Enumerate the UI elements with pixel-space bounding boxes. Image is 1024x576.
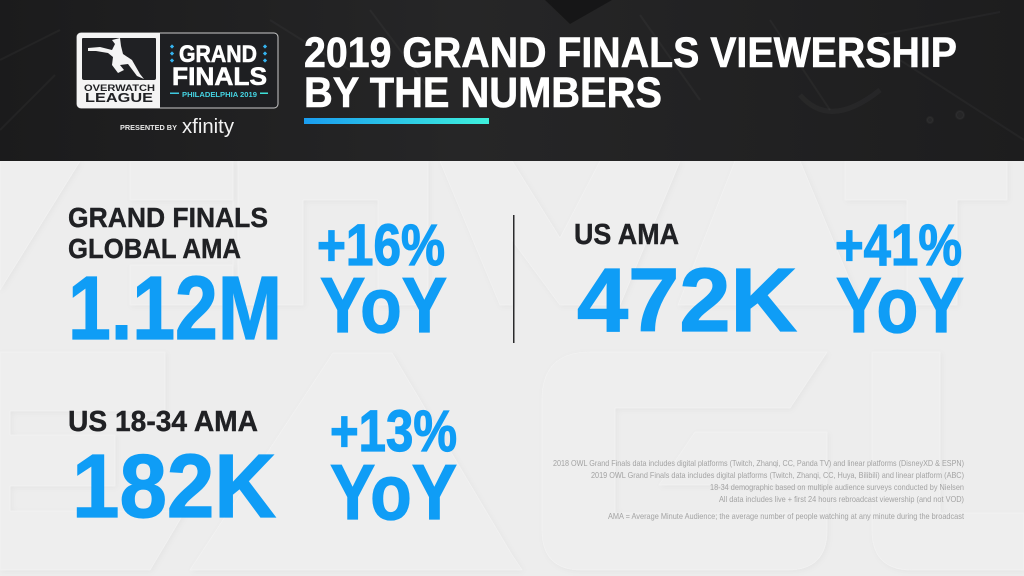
panel: dark header <box>0 0 1024 161</box>
footnotes: 18-34 demographic based on multiple audience surveys conducted by Nielsen <box>710 483 964 492</box>
growth: +13% YoY <box>330 399 457 536</box>
footnotes: AMA = Average Minute Audience; the average number of people watching at any minute during the broadcast <box>608 512 965 521</box>
growth: +16% YoY: +16% <box>317 213 445 278</box>
label: US AMA: US AMA <box>574 219 679 251</box>
logo: Overwatch League Grand Finals <box>77 33 278 108</box>
label: grand finals global AMA <box>68 202 268 264</box>
sponsor: presented by xfinity <box>120 116 234 138</box>
value: 182K: 182K <box>72 437 276 537</box>
icon: logo stars <box>170 44 267 63</box>
logo text: Overwatch League: LEAGUE <box>85 91 153 105</box>
footnotes: All data includes live + first 24 hours rebroadcast viewership (and not VOD) <box>719 495 964 504</box>
growth: +16% YoY: YoY <box>320 261 447 349</box>
growth: +41% YoY: +41% <box>835 213 962 278</box>
logo text: Overwatch League: OVERWATCH <box>84 83 155 94</box>
label: grand finals global AMA: GRAND FINALS <box>68 202 268 233</box>
sponsor: presented by xfinity: xfinity <box>182 116 234 138</box>
label: US 18-34 AMA: US 18-34 AMA <box>68 406 258 438</box>
title: 2019 GRAND FINALS VIEWERSHIP <box>304 29 957 77</box>
growth: +13% YoY: YoY <box>330 448 457 536</box>
stat: grand finals global AMA <box>68 202 447 359</box>
growth: +41% YoY <box>835 213 964 349</box>
growth: +41% YoY: YoY <box>836 261 964 349</box>
logo text: Philadelphia 2019: PHILADELPHIA 2019 <box>182 90 257 99</box>
title: BY THE NUMBERS <box>304 69 662 117</box>
icon: player silhouette panel <box>82 38 156 80</box>
logo text: Grand Finals: GRAND <box>179 41 257 68</box>
title accent bar <box>304 118 489 124</box>
background watermark: OVERWATCH LEAGUE letters <box>0 161 1024 570</box>
panel: light embossed background <box>0 161 1024 576</box>
title <box>304 29 957 117</box>
stat: US AMA <box>574 213 964 351</box>
logo text: Grand Finals: FINALS <box>172 63 267 91</box>
label: grand finals global AMA: GLOBAL AMA <box>68 233 241 264</box>
stat: US 18-34 AMA <box>68 399 457 537</box>
logo text: Grand Finals <box>172 41 267 91</box>
header photo texture <box>0 10 1024 140</box>
logo text: Overwatch League <box>84 83 155 105</box>
value: 1.12M: 1.12M <box>68 259 282 359</box>
footnotes <box>553 459 965 521</box>
growth: +16% YoY <box>317 213 447 349</box>
footnotes: 2019 OWL Grand Finals data includes digital platforms (Twitch, Zhanqi, CC, Huya, Bilibili) and linear platform (ABC) <box>591 471 964 480</box>
value: 472K: 472K <box>577 251 797 351</box>
footnotes: 2018 OWL Grand Finals data includes digital platforms (Twitch, Zhanqi, CC, Panda TV) and linear platforms (DisneyXD & ESPN) <box>553 459 964 468</box>
growth: +13% YoY: +13% <box>330 399 457 464</box>
divider <box>513 215 514 343</box>
sponsor: presented by xfinity: PRESENTED BY <box>120 123 177 132</box>
